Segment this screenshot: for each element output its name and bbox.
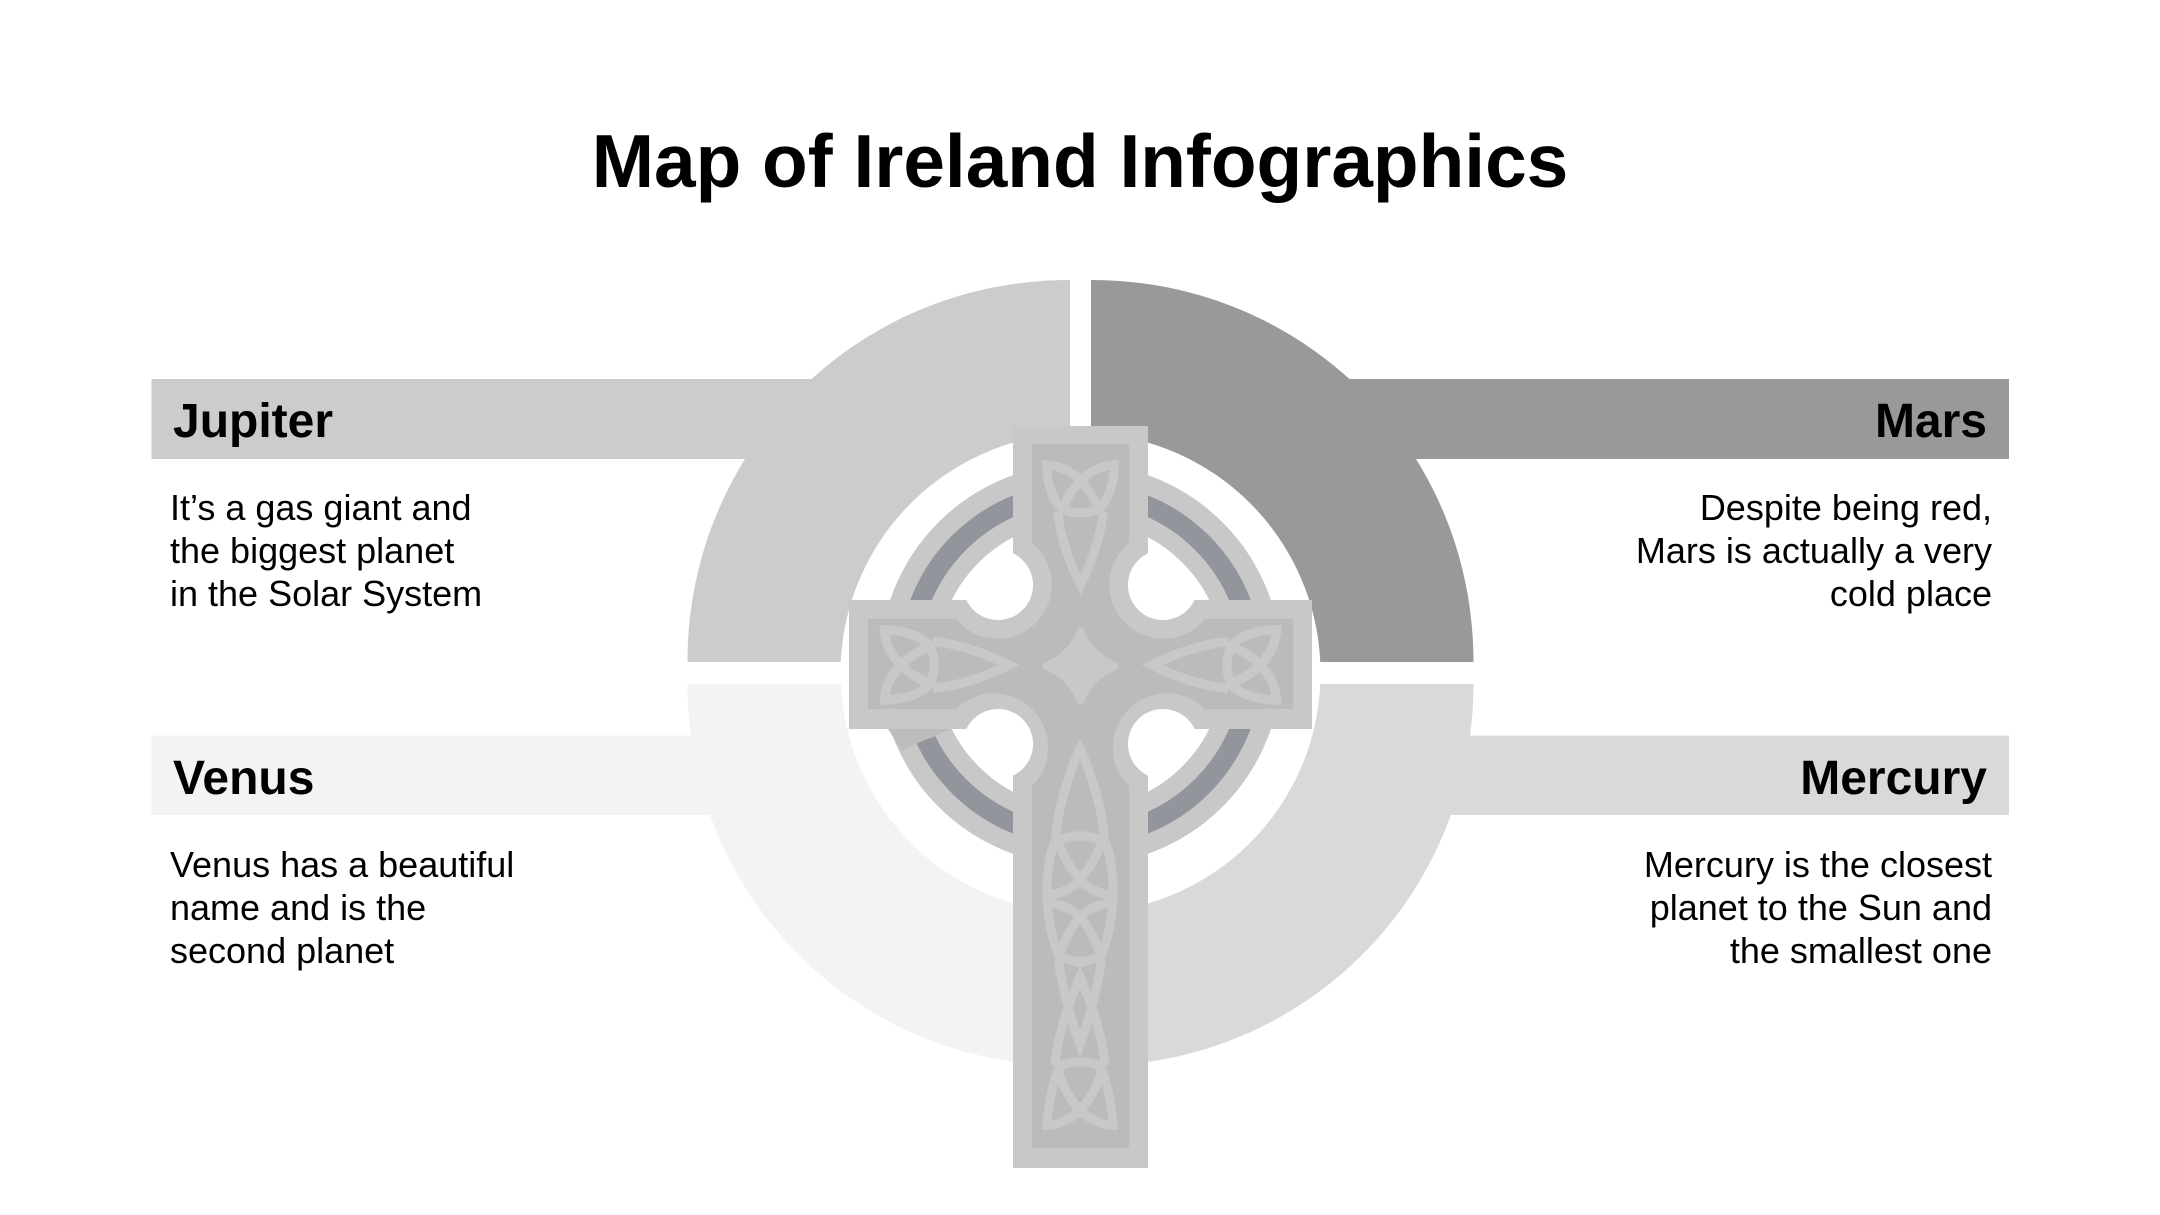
icon: Celtic cross — [849, 426, 1312, 1168]
Mercury quarter ring and bar — [1091, 684, 2009, 1066]
cross ring — [888, 492, 1253, 837]
Jupiter description: the biggest planet — [170, 530, 454, 571]
Mercury description: planet to the Sun and — [1650, 887, 1992, 928]
panel: Jupiter — [152, 280, 1070, 662]
cross inner panel — [868, 444, 1293, 1148]
Venus quarter ring and bar — [152, 684, 1070, 1066]
centre star — [1046, 632, 1114, 700]
Venus description: second planet — [170, 930, 394, 971]
cross outer body — [849, 426, 1312, 1168]
Mars description: Despite being red, — [1700, 487, 1992, 528]
Mercury description: the smallest one — [1730, 930, 1992, 971]
Mars description: cold place — [1830, 573, 1992, 614]
Mercury heading: Mercury — [1800, 752, 1987, 805]
knot: right arm — [1152, 630, 1277, 700]
title: Map of Ireland Infographics — [592, 119, 1568, 203]
knot: lower shaft — [1047, 749, 1113, 1125]
panel: Mercury — [1091, 684, 2009, 1066]
panel: Venus — [152, 684, 1070, 1066]
Mars quarter ring and bar — [1091, 280, 2009, 662]
Venus description: Venus has a beautiful — [170, 844, 514, 885]
Mars heading: Mars — [1875, 395, 1987, 448]
Mercury description: Mercury is the closest — [1644, 844, 1992, 885]
Jupiter description: in the Solar System — [170, 573, 482, 614]
knot: top arm — [1047, 465, 1114, 585]
Venus heading: Venus — [173, 752, 314, 805]
panel: Mars — [1091, 280, 2009, 662]
Venus description: name and is the — [170, 887, 426, 928]
knot: left arm — [884, 630, 1009, 700]
Jupiter description: It’s a gas giant and — [170, 487, 472, 528]
Mars description: Mars is actually a very — [1636, 530, 1992, 571]
Jupiter quarter ring and bar — [152, 280, 1070, 662]
Jupiter heading: Jupiter — [173, 395, 333, 448]
